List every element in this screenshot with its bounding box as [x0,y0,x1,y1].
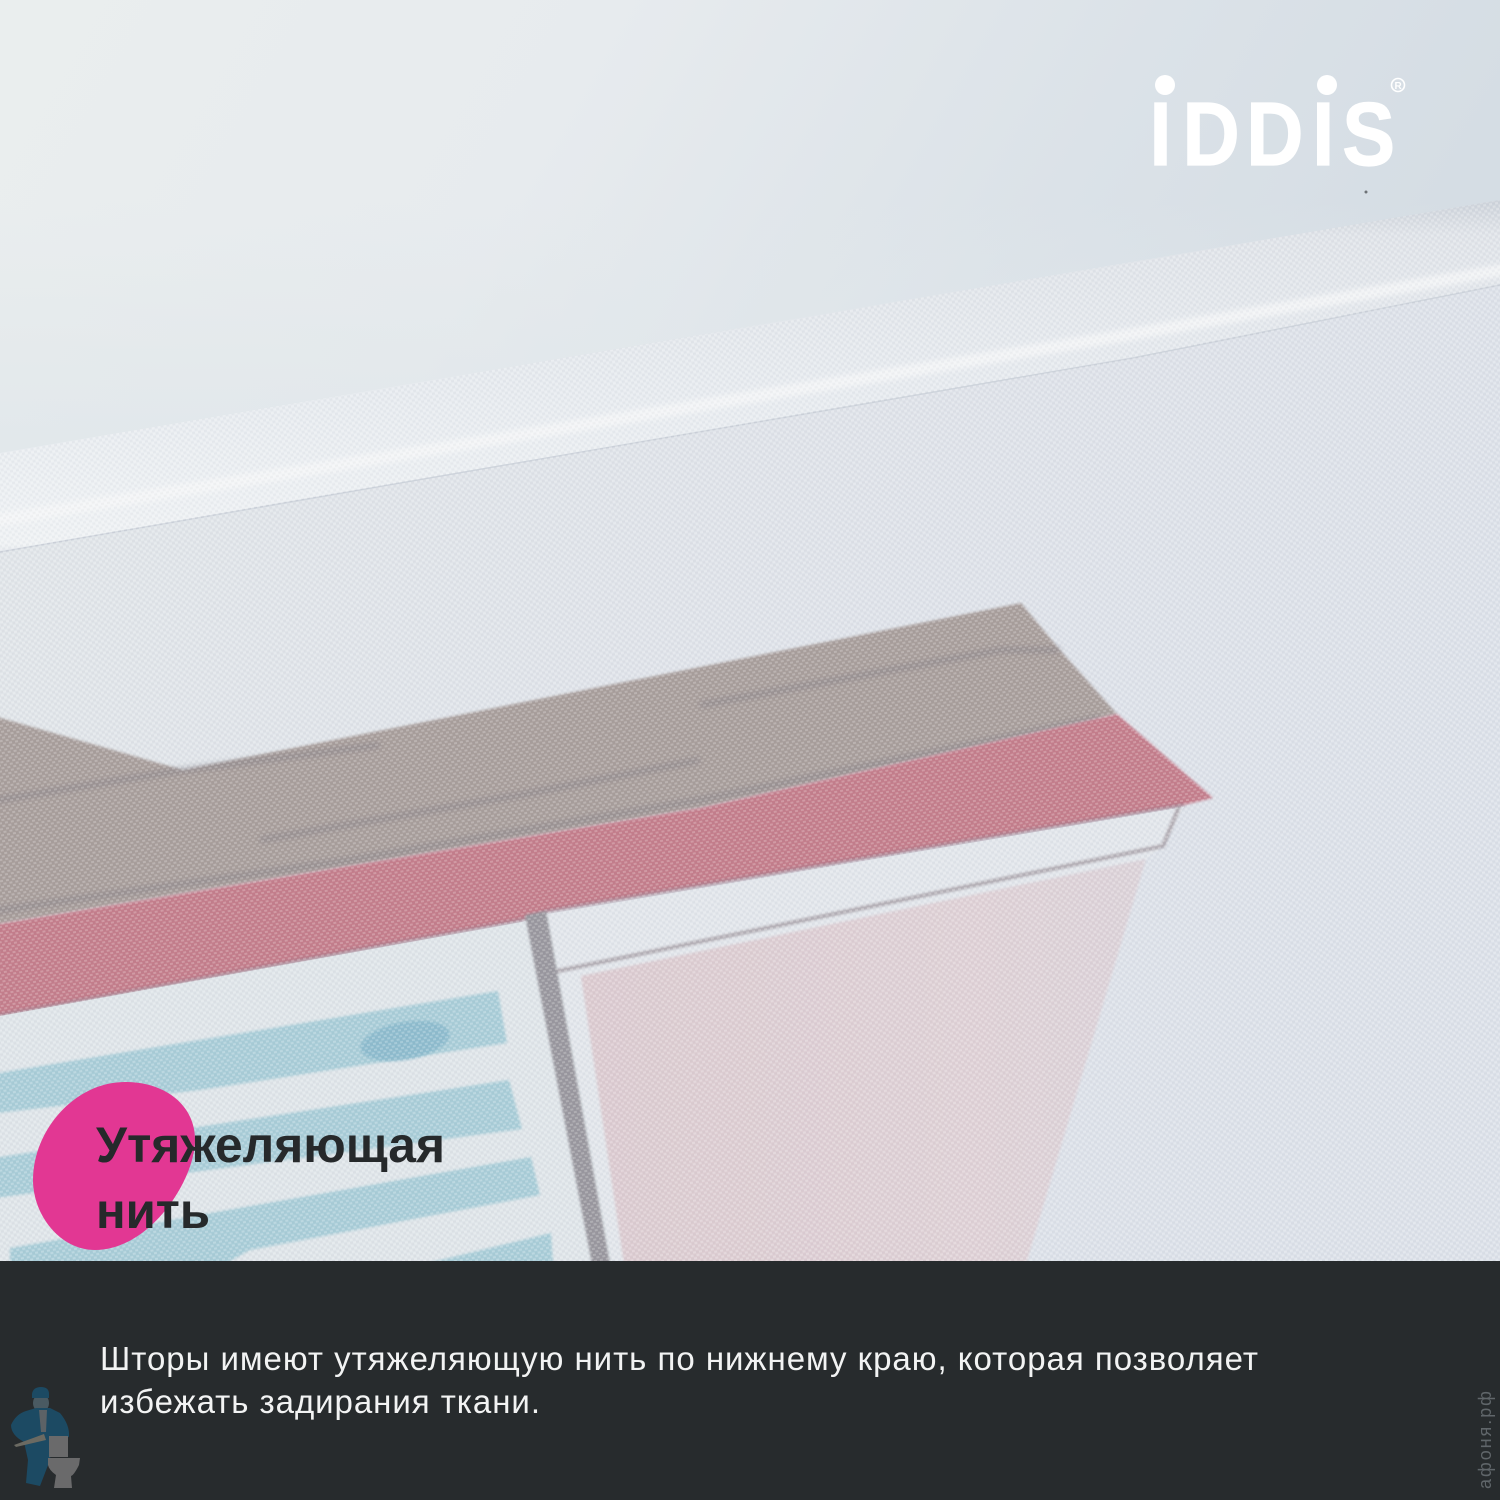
logo: IDDIS: IDDIS [1150,83,1395,184]
description text: избежать задирания ткани. [100,1383,540,1420]
description text: Шторы имеют утяжеляющую нить по нижнему краю, которая позволяет [100,1340,1258,1377]
roof: taupe slope [0,603,1117,927]
printed house illustration [0,603,1213,1264]
shutter slats [0,991,553,1264]
window frame and shutters [0,807,1184,1264]
background: bathroom wall [0,0,1500,520]
registered mark: R [1394,81,1402,92]
shutter paint blot [357,1014,453,1068]
roof: red band [0,714,1213,1019]
fabric weave texture [0,200,1500,1262]
heading [96,1117,445,1239]
pink wall [581,859,1146,1264]
icon: plumber with toilet [11,1387,80,1488]
heading: Утяжеляющая [96,1117,445,1173]
registered mark [1392,78,1404,92]
heading: нить [96,1183,210,1239]
bottom dark panel [0,1261,1500,1500]
curtain hem [0,200,1500,552]
description text [100,1340,1258,1420]
curtain fabric [0,285,1500,1262]
grey post [525,911,610,1264]
pink accent blob [33,1082,195,1250]
grey lintel line [553,807,1179,972]
watermark: афоня.рф [1475,1391,1495,1489]
